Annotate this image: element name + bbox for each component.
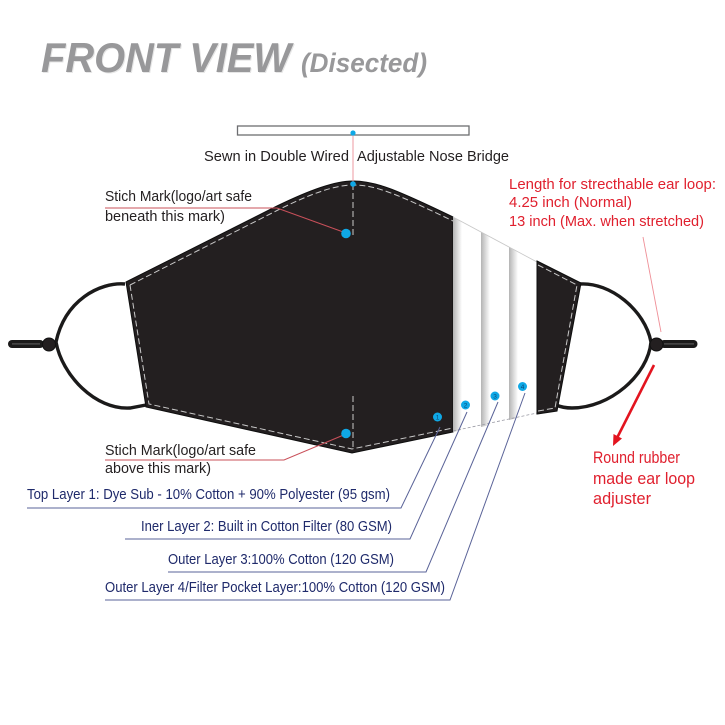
layer marker 2: 2: [464, 402, 468, 410]
nose bridge label: Adjustable Nose Bridge: [357, 149, 509, 165]
layer 1 label and leader: [27, 427, 440, 508]
ear loop adjuster label: Round rubber: [593, 449, 680, 467]
title: (Disected): [301, 48, 427, 78]
ear loop adjuster label: [593, 449, 695, 508]
ear loop length note: [509, 177, 716, 332]
title: FRONT VIEW: [41, 34, 294, 81]
layer marker 2: [461, 400, 470, 410]
bottom stitch mark callout: Stich Mark(logo/art safe: [105, 443, 256, 459]
layer marker 3: 3: [493, 394, 497, 400]
layer marker 4: [518, 382, 527, 391]
right ear loop: [556, 284, 698, 408]
layer 3 label and leader: Outer Layer 3:100% Cotton (120 GSM): [168, 552, 394, 568]
white inner layers: [453, 217, 537, 431]
nose bridge wire: [238, 126, 469, 135]
layer 4 label and leader: Outer Layer 4/Filter Pocket Layer:100% Cotton (120 GSM): [105, 580, 445, 596]
nose bridge label: [204, 149, 509, 165]
layer 2 label and leader: Iner Layer 2: Built in Cotton Filter (80 GSM): [141, 519, 392, 535]
ear loop length note: Length for strecthable ear loop:: [509, 177, 716, 193]
layer marker 4: 4: [521, 384, 525, 391]
layer 3 label and leader: [168, 402, 498, 572]
arrow: ear loop adjuster: [613, 365, 654, 446]
nose bridge label: Sewn in Double Wired: [204, 149, 349, 165]
title: FRONT VIEW: [42, 35, 295, 82]
layer marker 1: 1: [436, 414, 440, 422]
mask body: [126, 181, 581, 453]
bottom stitched edge: [453, 413, 537, 431]
ear loop length note: 4.25 inch (Normal): [509, 195, 632, 211]
ear loop adjuster label: made ear loop: [593, 470, 695, 488]
title: [41, 34, 427, 82]
ear loop length note: 13 inch (Max. when stretched): [509, 214, 704, 230]
bottom stitch mark callout: above this mark): [105, 461, 211, 477]
top stitch mark callout: beneath this mark): [105, 209, 225, 225]
nose bridge leader: [350, 130, 356, 187]
left black layer: [126, 181, 453, 453]
top stitch mark callout: [105, 189, 351, 238]
layer 4 label and leader: [105, 393, 525, 600]
layer fold shadows: [453, 217, 518, 432]
right black panel: [537, 261, 581, 414]
bottom stitch mark callout: [105, 429, 351, 477]
top edge of white layers: [453, 217, 537, 262]
layer 1 label and leader: Top Layer 1: Dye Sub - 10% Cotton + 90% Polyester (95 gsm): [27, 487, 390, 503]
ear loop adjuster label: adjuster: [593, 490, 651, 508]
top stitch mark callout: Stich Mark(logo/art safe: [105, 189, 252, 205]
left ear loop: [8, 284, 146, 408]
layer marker 1: [433, 412, 442, 422]
layer marker 3: [490, 392, 500, 400]
layer 2 label and leader: [125, 412, 467, 539]
stitching: [130, 184, 577, 449]
